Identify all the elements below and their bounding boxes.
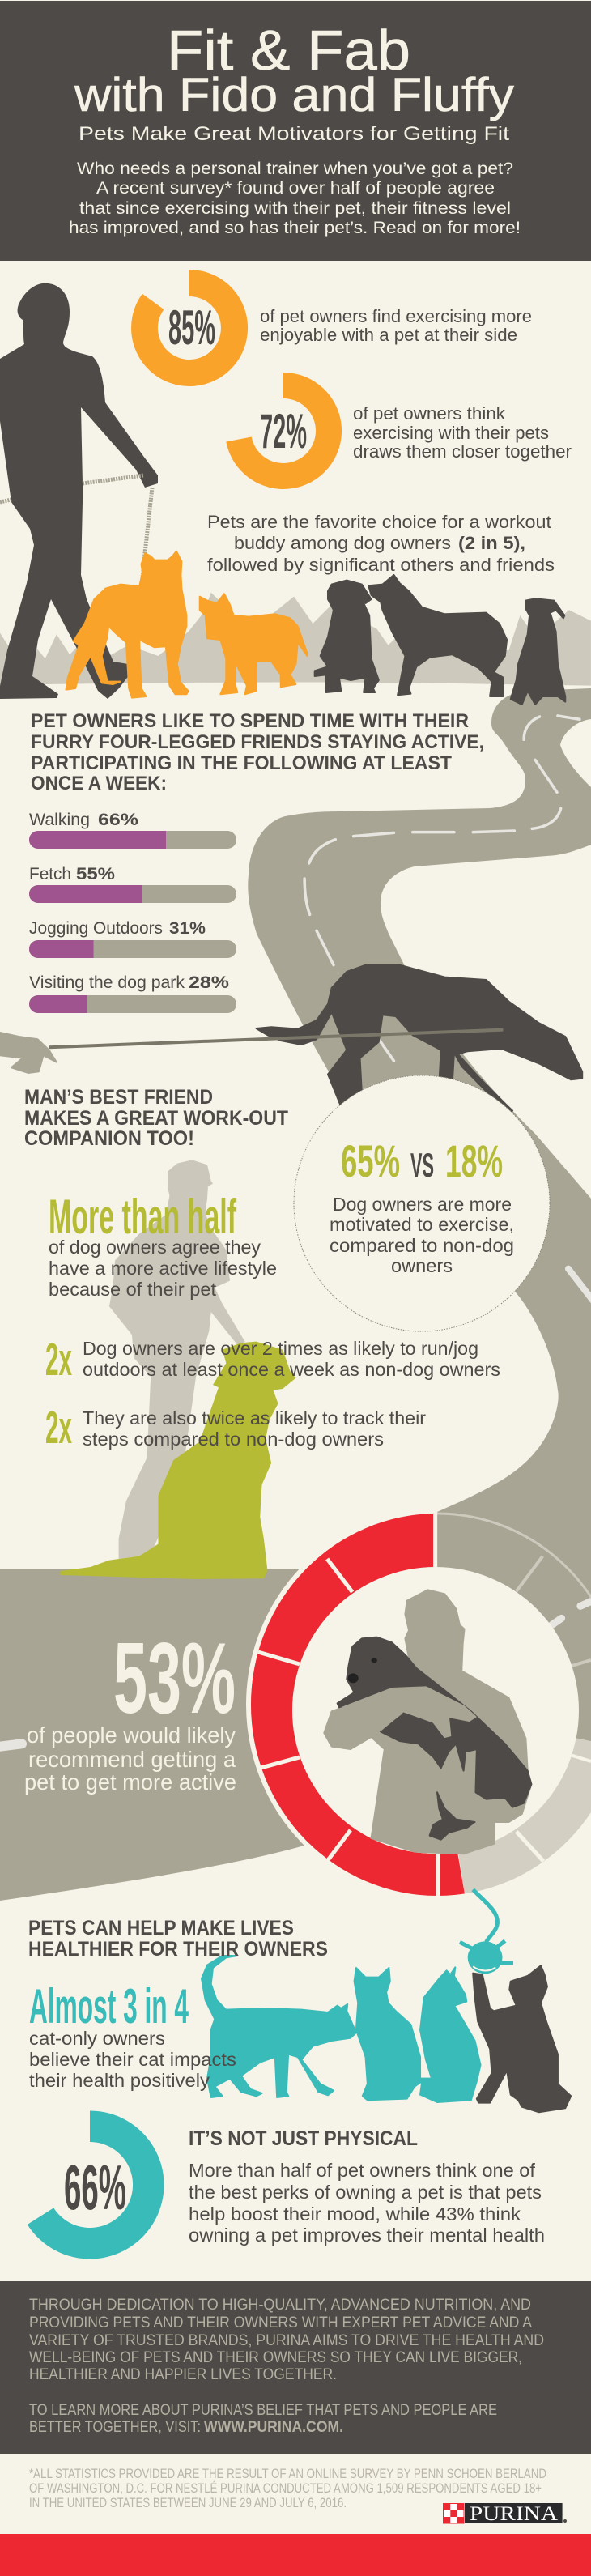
ring: red share xyxy=(251,1514,465,1896)
man walking dogs silhouette xyxy=(0,283,158,699)
stat: 53%: recommend getting a xyxy=(28,1747,236,1772)
leash to orange dog xyxy=(0,475,152,587)
subtitle: Pets Make Great Motivators for Getting Fit xyxy=(79,123,509,145)
stat text: 72%: draws them closer together xyxy=(353,441,572,462)
text: it's not just physical xyxy=(189,2127,545,2246)
stat: 2x run/jog: 2x xyxy=(45,1334,72,1386)
leash xyxy=(49,1030,503,1047)
65% vs 18%: 65% xyxy=(341,1135,400,1186)
stat: 53% xyxy=(24,1623,236,1795)
heading: pet owners: PET OWNERS LIKE TO SPEND TIME WITH THEIR xyxy=(31,710,469,732)
stat text: 85%: of pet owners find exercising more xyxy=(260,306,532,326)
donut: 66% xyxy=(28,2110,164,2259)
title xyxy=(74,19,514,121)
stat: almost 3 in 4: Almost 3 in 4 xyxy=(29,1979,189,2033)
footnote: IN THE UNITED STATES BETWEEN JUNE 29 AND JULY 6, 2016. xyxy=(29,2496,347,2510)
text: it's not just physical: More than half of pet owners think one of xyxy=(189,2160,536,2181)
heading: man's best friend: MAKES A GREAT WORK-OUT xyxy=(24,1107,288,1130)
ring: inner circle xyxy=(292,1567,579,1854)
stat: 2x track steps: They are also twice as likely to track their xyxy=(83,1407,426,1429)
title: with Fido and Fluffy xyxy=(74,69,514,121)
bar: fetch: Fetch xyxy=(29,865,71,884)
stat: 2x track steps: steps compared to non-dog owners xyxy=(83,1429,384,1450)
heading: healthier lives: PETS CAN HELP MAKE LIVES xyxy=(28,1917,294,1939)
callout text: motivated to exercise, xyxy=(330,1214,514,1235)
bar: dog park: 28% xyxy=(189,973,229,992)
purina logo xyxy=(444,2503,567,2525)
heading: man's best friend xyxy=(24,1086,288,1150)
stat: more than half: More than half xyxy=(49,1190,237,1244)
intro paragraph: Who needs a personal trainer when you’ve got a pet? xyxy=(77,160,513,178)
purina statement: WELL-BEING OF PETS AND THEIR OWNERS SO THEY CAN LIVE BIGGER, xyxy=(29,2349,522,2366)
callout text: Dog owners are more xyxy=(333,1194,512,1215)
text: it's not just physical: IT’S NOT JUST PHYSICAL xyxy=(189,2127,418,2150)
stat: 53%: pet to get more active xyxy=(24,1769,236,1795)
purina statement: VARIETY OF TRUSTED BRANDS, PURINA AIMS TO DRIVE THE HEALTH AND xyxy=(29,2332,544,2349)
playing cat xyxy=(473,1965,571,2112)
stat: 2x run/jog: Dog owners are over 2 times as likely to run/jog xyxy=(83,1338,478,1359)
ring: cream outline xyxy=(246,1569,309,1846)
ring chart: 53% xyxy=(249,1511,591,1898)
workout buddy text xyxy=(207,512,555,575)
bar: walking xyxy=(29,811,236,849)
bar: jogging xyxy=(29,919,236,958)
man hugging dog xyxy=(324,1590,531,1854)
heading: pet owners: PARTICIPATING IN THE FOLLOWING AT LEAST xyxy=(31,752,452,774)
header panel xyxy=(0,1,591,261)
stat: almost 3 in 4 xyxy=(29,1979,236,2091)
callout text xyxy=(330,1194,514,1276)
workout buddy text: buddy among dog owners xyxy=(234,533,451,553)
bar: walking: Walking xyxy=(29,811,90,829)
stat: more than half: of dog owners agree they xyxy=(49,1237,261,1258)
sitting cats xyxy=(355,1967,481,2102)
bar: fetch: 55% xyxy=(76,865,115,884)
bar: fetch xyxy=(29,865,236,903)
red footer band xyxy=(0,2534,591,2576)
text: it's not just physical: the best perks of owning a pet is that pets xyxy=(189,2182,542,2203)
heading: pet owners: ONCE A WEEK: xyxy=(31,773,167,794)
hand xyxy=(0,1033,57,1073)
dark footer panel xyxy=(0,2281,591,2454)
donut: 72% xyxy=(226,373,342,489)
purina logo: PURINA xyxy=(470,2503,558,2525)
intro paragraph: has improved, and so has their pet’s. Read on for more! xyxy=(69,219,521,237)
heading: healthier lives: HEALTHIER FOR THEIR OWNERS xyxy=(28,1938,328,1961)
workout buddy text: (2 in 5), xyxy=(458,533,525,553)
stat: 2x track steps: 2x xyxy=(45,1402,72,1454)
stat: 53%: 53% xyxy=(113,1623,236,1735)
bar: walking: 66% xyxy=(98,811,138,829)
man standing silhouette xyxy=(109,1160,245,1559)
65% vs 18% xyxy=(341,1135,503,1186)
donut: 85% xyxy=(131,270,248,386)
cats and toy xyxy=(202,1889,571,2112)
learn more: TO LEARN MORE ABOUT PURINA’S BELIEF THAT PETS AND PEOPLE ARE xyxy=(29,2402,497,2419)
group of dogs xyxy=(66,551,565,705)
learn more xyxy=(29,2402,497,2436)
heading: healthier lives xyxy=(28,1917,328,1961)
stat: almost 3 in 4: believe their cat impacts xyxy=(29,2049,236,2070)
purina statement xyxy=(29,2297,544,2383)
stat text: 85% xyxy=(260,306,532,345)
intro paragraph: A recent survey* found over half of people agree xyxy=(96,179,495,198)
stat text: 72%: of pet owners think xyxy=(353,403,506,424)
stat: more than half xyxy=(49,1190,277,1300)
stat: 2x run/jog: outdoors at least once a week as non-dog owners xyxy=(83,1359,500,1380)
donut: 72%: 72% xyxy=(260,404,307,458)
purina statement: THROUGH DEDICATION TO HIGH-QUALITY, ADVANCED NUTRITION, AND xyxy=(29,2297,531,2314)
heading: man's best friend: MAN’S BEST FRIEND xyxy=(24,1086,213,1109)
bar: dog park xyxy=(29,973,236,1013)
dotted circle callout xyxy=(294,1075,550,1331)
text: it's not just physical: owning a pet improves their mental health xyxy=(189,2225,545,2246)
heading: pet owners: FURRY FOUR-LEGGED FRIENDS STAYING ACTIVE, xyxy=(31,731,484,753)
purina statement: PROVIDING PETS AND THEIR OWNERS WITH EXPERT PET ADVICE AND A xyxy=(29,2314,532,2331)
workout buddy text: Pets are the favorite choice for a workout xyxy=(207,512,551,532)
ring: segment gaps xyxy=(258,1512,591,1897)
donut: 66%: 66% xyxy=(64,2152,126,2223)
heading: man's best friend: COMPANION TOO! xyxy=(24,1127,194,1150)
footnote xyxy=(29,2467,546,2510)
bar: dog park: Visiting the dog park xyxy=(29,973,185,992)
green dog silhouette xyxy=(60,1342,296,1579)
65% vs 18%: VS xyxy=(410,1146,434,1184)
road xyxy=(0,688,591,1901)
title: Fit & Fab xyxy=(167,19,410,82)
stat: almost 3 in 4: their health positively xyxy=(29,2070,210,2091)
bar: jogging: Jogging Outdoors xyxy=(29,919,163,938)
intro paragraph: that since exercising with their pet, their fitness level xyxy=(79,199,511,218)
toy string xyxy=(473,1889,497,1942)
purina statement: HEALTHIER AND HAPPIER LIVES TOGETHER. xyxy=(29,2366,337,2383)
callout text: compared to non-dog xyxy=(330,1235,514,1256)
callout text: owners xyxy=(391,1255,453,1276)
bar chart: weekly activities xyxy=(29,811,236,1013)
stat: more than half: have a more active lifestyle xyxy=(49,1258,277,1279)
stat text: 72% xyxy=(353,403,572,462)
stat: almost 3 in 4: cat-only owners xyxy=(29,2028,165,2049)
bar: jogging: 31% xyxy=(169,919,206,938)
walking cat xyxy=(202,1956,356,2097)
stat text: 85%: enjoyable with a pet at their side xyxy=(260,325,517,345)
toy ball xyxy=(460,1941,513,1974)
mountains xyxy=(0,593,591,688)
stat: 2x run/jog xyxy=(45,1334,500,1386)
road centre line dashes xyxy=(0,716,591,1747)
ring: light remainder xyxy=(458,1738,591,1893)
dog on leash xyxy=(0,965,582,1113)
heading: pet owners xyxy=(31,710,484,794)
stat text: 72%: exercising with their pets xyxy=(353,423,549,443)
workout buddy text: followed by significant others and friends xyxy=(207,555,555,575)
stat: 53%: of people would likely xyxy=(27,1722,236,1748)
learn more: BETTER TOGETHER, VISIT: xyxy=(29,2419,201,2436)
stat: 2x track steps xyxy=(45,1402,426,1454)
donut: 85%: 85% xyxy=(168,300,215,355)
text: it's not just physical: help boost their mood, while 43% think xyxy=(189,2203,521,2225)
stat: more than half: because of their pet xyxy=(49,1279,217,1300)
intro paragraph xyxy=(69,160,521,237)
65% vs 18%: 18% xyxy=(445,1135,503,1186)
learn more: WWW.PURINA.COM. xyxy=(204,2419,343,2436)
